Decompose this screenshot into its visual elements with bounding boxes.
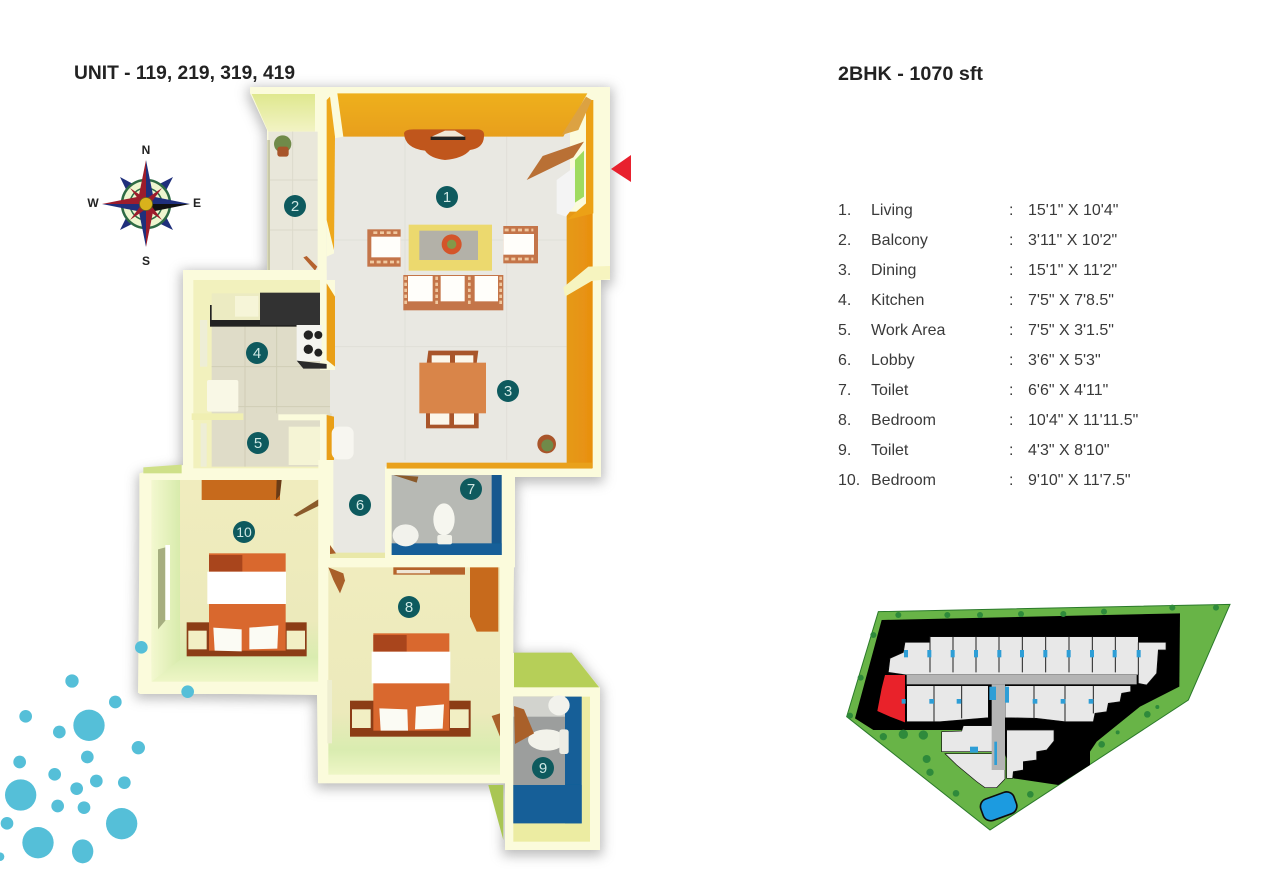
row 3	[838, 262, 1117, 279]
row 4: Kitchen	[871, 292, 924, 309]
row 6: Lobby	[871, 352, 915, 369]
row 5: :	[1009, 322, 1013, 339]
wash basin	[332, 427, 354, 459]
row 10: 9'10" X 11'7.5"	[1028, 472, 1131, 489]
heading: apartment type and area: 2BHK - 1070 sft	[838, 64, 984, 85]
corridor	[907, 675, 1137, 770]
row 10: 10.	[838, 472, 860, 489]
row 6: :	[1009, 352, 1013, 369]
row 2: Balcony	[871, 232, 928, 249]
double bed	[187, 553, 307, 656]
row 7: :	[1009, 382, 1013, 399]
marker 6: 6	[356, 497, 364, 514]
balcony room	[252, 94, 318, 271]
row 9	[838, 442, 1110, 459]
washing machine box	[289, 427, 320, 465]
marker 7: 7	[467, 481, 475, 498]
icon: compass rose: N	[142, 143, 150, 157]
marker 3: 3	[504, 383, 512, 400]
row 6: 6.	[838, 352, 851, 369]
row 6	[838, 352, 1101, 369]
toilet 9 and utility	[488, 653, 600, 850]
toilet bowl	[433, 503, 455, 544]
marker 10: 10	[236, 524, 252, 540]
marker 1	[436, 186, 458, 208]
row 4: 7'5" X 7'8.5"	[1028, 292, 1114, 309]
row 1: 1.	[838, 202, 851, 219]
row 7: 7.	[838, 382, 851, 399]
rug and coffee table	[409, 225, 492, 271]
marker 2	[284, 195, 306, 217]
row 3: 15'1" X 11'2"	[1028, 262, 1117, 279]
row 3: 3.	[838, 262, 851, 279]
upper rooms	[183, 93, 610, 473]
row 2: :	[1009, 232, 1013, 249]
row 6: 3'6" X 5'3"	[1028, 352, 1101, 369]
entrance door	[527, 97, 592, 180]
stair and lift markers	[902, 650, 1141, 765]
kitchen counter and sink	[210, 293, 320, 327]
row 9: 4'3" X 8'10"	[1028, 442, 1110, 459]
wash basin	[393, 524, 419, 546]
row 10: :	[1009, 472, 1013, 489]
wash basin	[548, 695, 570, 715]
icon: compass rose	[87, 143, 201, 268]
lower rooms	[139, 460, 600, 850]
wardrobe and TV	[393, 567, 498, 632]
row 7: 6'6" X 4'11"	[1028, 382, 1108, 399]
building blocks	[888, 637, 1166, 788]
marker 4	[246, 342, 268, 364]
double bed	[350, 633, 471, 737]
sofa	[403, 275, 503, 310]
entrance window	[557, 167, 575, 217]
bedroom 10 room	[139, 465, 319, 694]
row 5: Work Area	[871, 322, 946, 339]
row 5: 7'5" X 3'1.5"	[1028, 322, 1114, 339]
marker 5: 5	[254, 435, 262, 452]
row 9: Toilet	[871, 442, 909, 459]
dining table and chairs	[419, 351, 486, 428]
TV unit	[404, 129, 484, 160]
armchair left	[367, 229, 401, 267]
room number markers	[233, 186, 554, 779]
floor plan	[138, 87, 610, 853]
marker 9: 9	[539, 760, 547, 777]
marker 9	[532, 757, 554, 779]
row 8: Bedroom	[871, 412, 936, 429]
row 2: 3'11" X 10'2"	[1028, 232, 1117, 249]
row 8: 8.	[838, 412, 851, 429]
lobby and toilet 7	[318, 460, 515, 567]
icon: compass rose: W	[87, 196, 99, 210]
bedroom 8 room	[318, 558, 513, 783]
row 9: 9.	[838, 442, 851, 459]
window	[158, 545, 170, 629]
row 10	[838, 472, 1131, 489]
row 5: 5.	[838, 322, 851, 339]
row 3: Dining	[871, 262, 916, 279]
row 2: 2.	[838, 232, 851, 249]
row 5	[838, 322, 1114, 339]
row 1	[838, 202, 1118, 219]
plant pot	[274, 135, 291, 157]
kitchen and work area	[183, 270, 354, 473]
marker 3	[497, 380, 519, 402]
row 4	[838, 292, 1114, 309]
refrigerator box	[207, 380, 238, 412]
decorative bubbles	[0, 641, 194, 863]
highlighted unit	[877, 675, 905, 722]
plan drop shadow	[138, 90, 610, 853]
row 7: Toilet	[871, 382, 909, 399]
plant pot	[537, 435, 556, 453]
row 9: :	[1009, 442, 1013, 459]
row 1: Living	[871, 202, 913, 219]
living and dining floor	[327, 93, 610, 473]
row 8: :	[1009, 412, 1013, 429]
marker 1: 1	[443, 189, 451, 206]
swimming pool	[978, 790, 1019, 823]
marker 2: 2	[291, 198, 299, 215]
trees	[847, 605, 1219, 798]
site driveway	[855, 613, 1180, 785]
heading: unit numbers: UNIT - 119, 219, 319, 419	[74, 63, 295, 84]
armchair right	[503, 226, 538, 263]
row 1: :	[1009, 202, 1013, 219]
marker 6	[349, 494, 371, 516]
stove	[297, 325, 327, 369]
plan outer walls	[138, 87, 610, 850]
icon: compass rose: S	[142, 254, 150, 268]
row 10: Bedroom	[871, 472, 936, 489]
row 4: 4.	[838, 292, 851, 309]
row 4: :	[1009, 292, 1013, 309]
row 8	[838, 412, 1138, 429]
marker 7	[460, 478, 482, 500]
row 1: 15'1" X 10'4"	[1028, 202, 1118, 219]
marker 8	[398, 596, 420, 618]
unit dividers	[930, 637, 1138, 722]
icon: compass rose: E	[193, 196, 201, 210]
marker 5	[247, 432, 269, 454]
row 7	[838, 382, 1108, 399]
room dimension list	[838, 202, 1138, 489]
row 8: 10'4" X 11'11.5"	[1028, 412, 1138, 429]
marker 10	[233, 521, 255, 543]
row 3: :	[1009, 262, 1013, 279]
site landscape	[847, 604, 1230, 830]
marker 8: 8	[405, 599, 413, 616]
marker 4: 4	[253, 345, 261, 362]
wardrobe	[202, 480, 282, 500]
site key plan	[847, 604, 1230, 830]
arrow: entrance marker	[611, 155, 631, 182]
toilet	[528, 729, 569, 754]
row 2	[838, 232, 1117, 249]
